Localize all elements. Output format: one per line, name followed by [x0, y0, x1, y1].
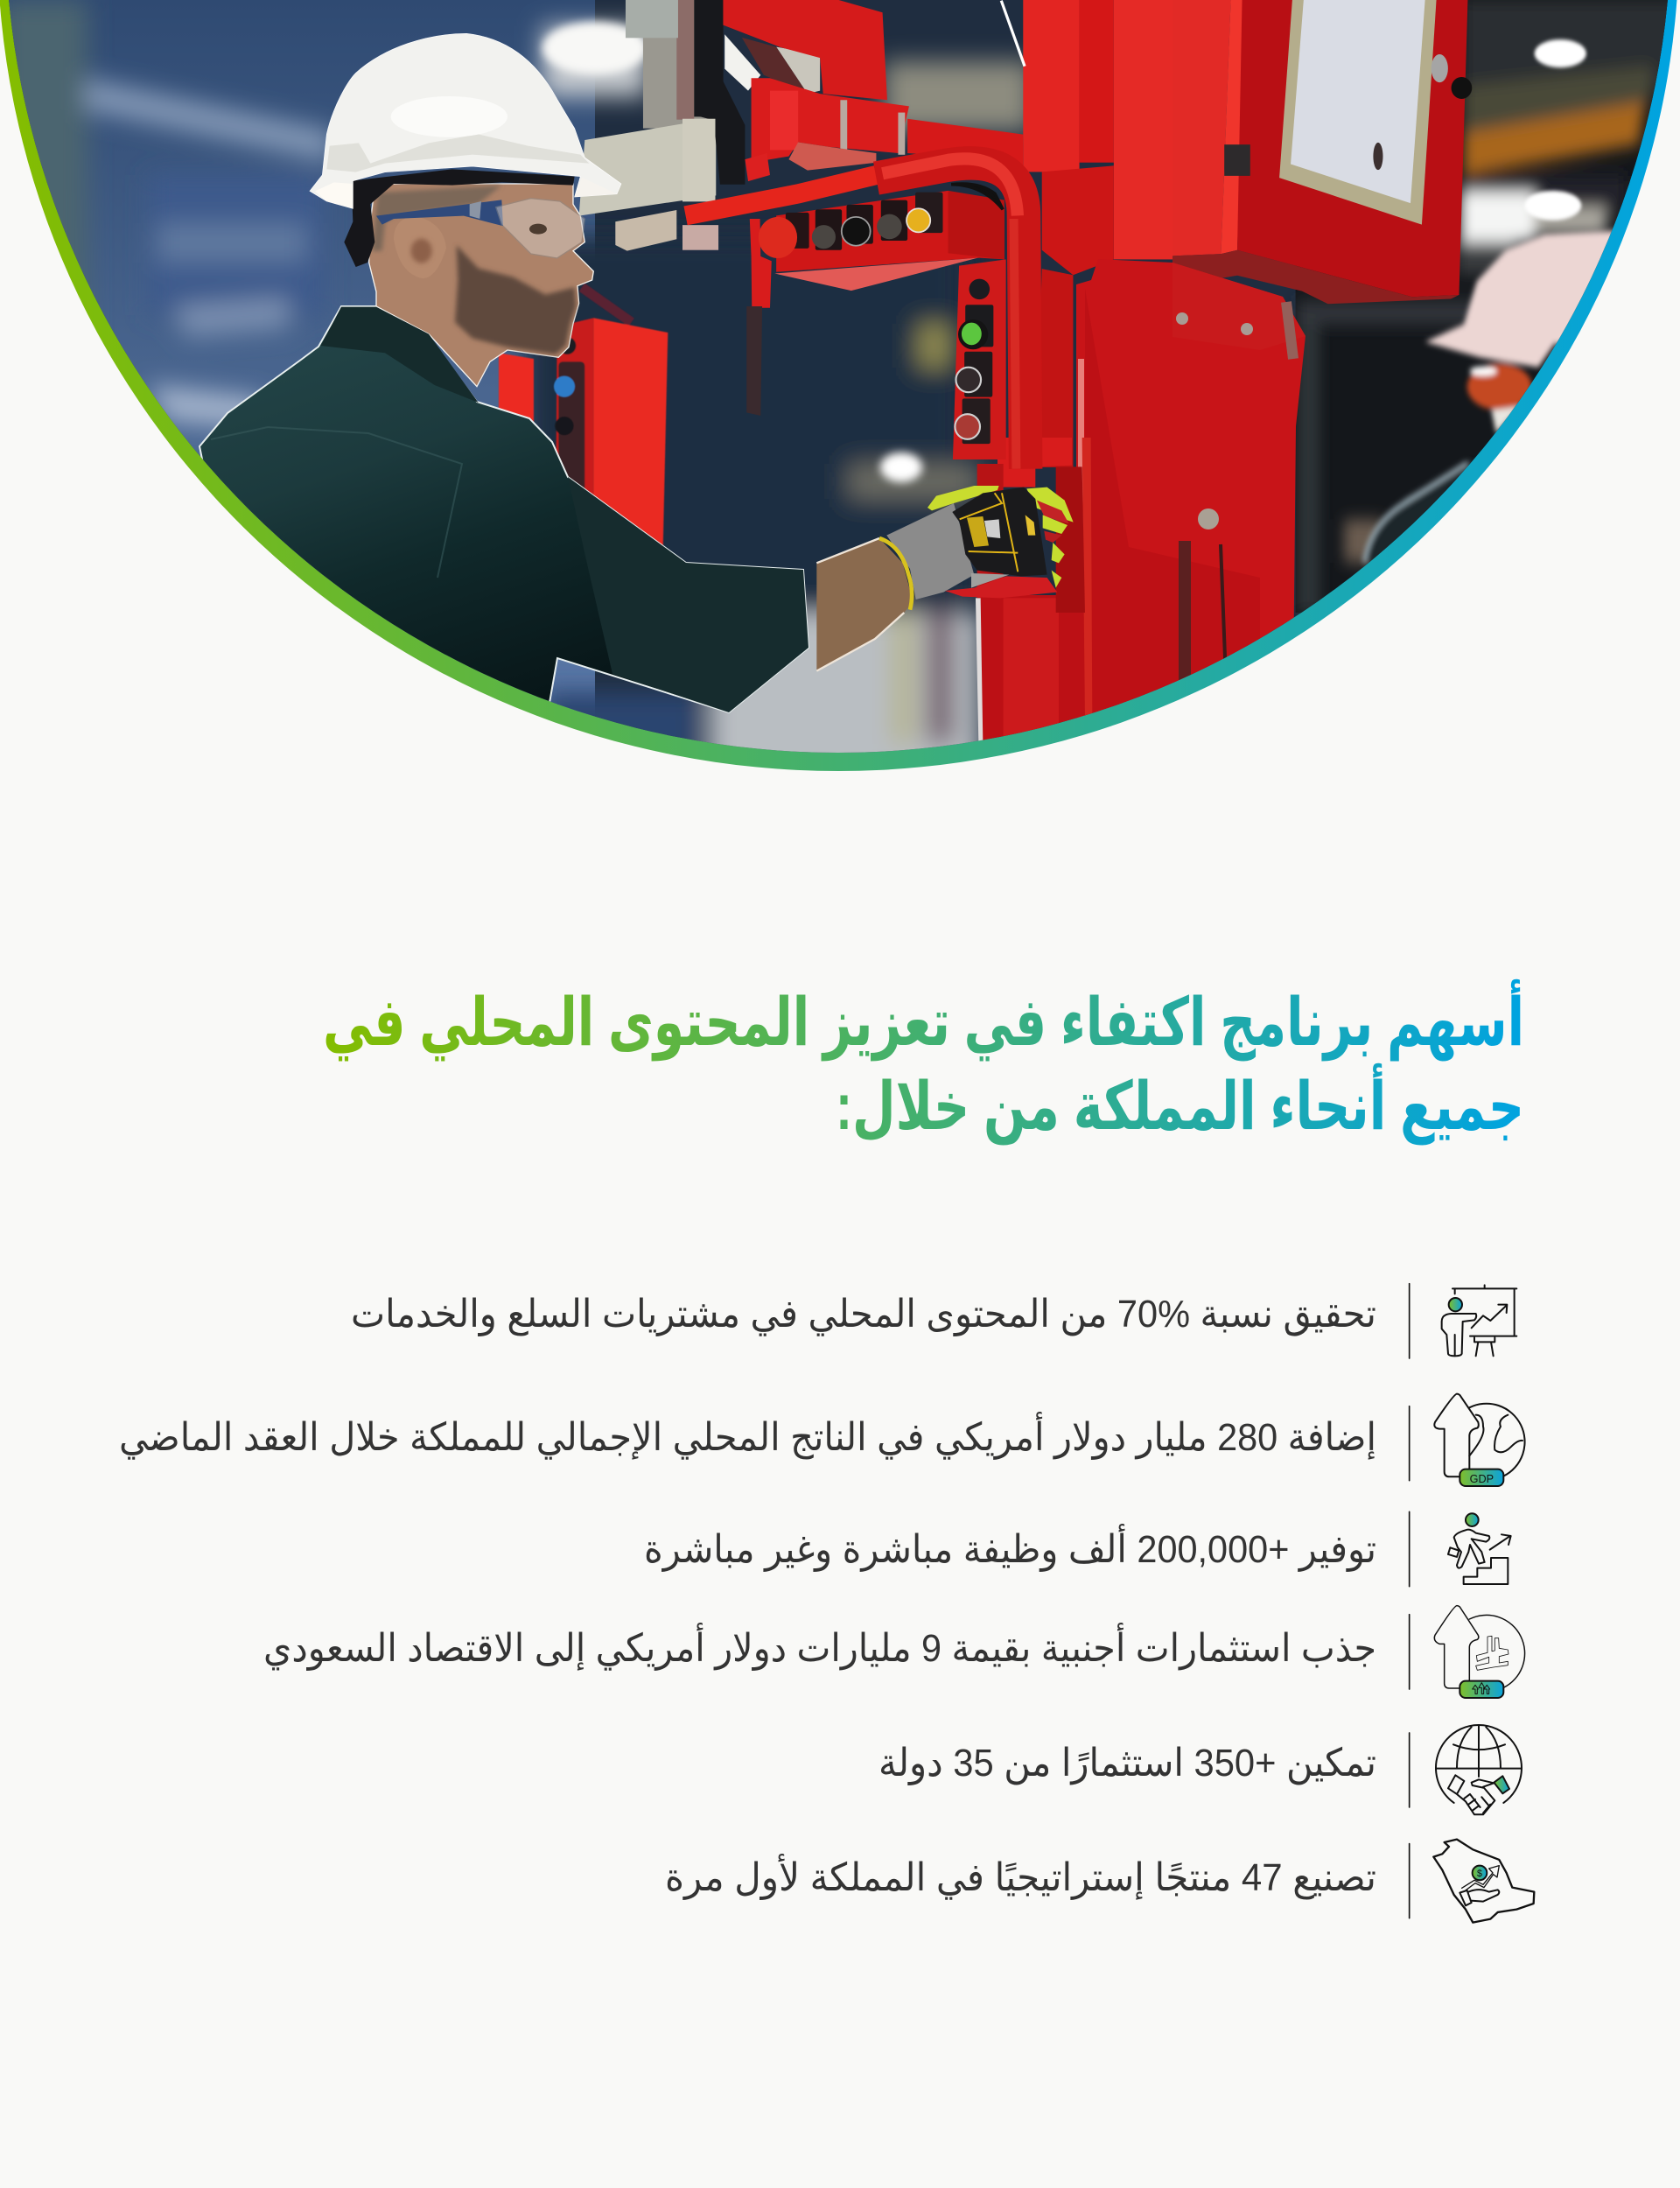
background right side	[1296, 0, 1680, 614]
row 2: GDP	[119, 1394, 1525, 1486]
main column	[1001, 0, 1173, 467]
glasses	[376, 199, 584, 258]
divider and icon: Saudi map	[1410, 1840, 1534, 1923]
divider and icon: climbing stairs	[1410, 1511, 1511, 1587]
worker	[200, 33, 1074, 753]
row 3: jobs	[644, 1511, 1511, 1587]
divider and icon: presenter	[1410, 1284, 1516, 1358]
text: تمكين +350 استثمارًا من 35 دولة	[878, 1742, 1376, 1785]
sleeve light area	[568, 477, 808, 712]
vertical pipe and button panel	[876, 158, 1026, 469]
text: تصنيع 47 منتجًا إستراتيجيًا في المملكة لأول مرة	[665, 1853, 1376, 1900]
row 4: foreign investment	[263, 1606, 1525, 1698]
divider and icon: Saudi map: $	[1477, 1869, 1482, 1879]
heading	[323, 978, 1524, 1146]
text: إضافة 280 مليار دولار أمريكي في الناتج المحلي الإجمالي للمملكة خلال العقد الماضي	[119, 1412, 1376, 1460]
divider and icon: investment arrow	[1410, 1606, 1525, 1698]
red machine: upper arm and control box	[682, 0, 1023, 416]
text: تحقيق نسبة %70 من المحتوى المحلي في مشتريات السلع والخدمات	[351, 1293, 1376, 1336]
row 5: investors	[878, 1725, 1522, 1814]
row 6: manufacturing	[665, 1840, 1534, 1923]
jacket	[200, 306, 808, 753]
photo: worker operating red machine	[0, 0, 1680, 788]
seam	[211, 427, 462, 578]
text: توفير +200,000 ألف وظيفة مباشرة وغير مباشرة	[644, 1524, 1376, 1572]
arm	[816, 486, 1074, 671]
divider and icon: globe handshake	[1410, 1725, 1522, 1814]
photo background: blurred factory	[0, 0, 1680, 788]
white hard hat	[310, 33, 621, 208]
cabinet	[1172, 0, 1472, 304]
head	[344, 169, 593, 387]
divider and icon: GDP: GDP	[1470, 1473, 1494, 1485]
lower column at hand	[976, 438, 1092, 740]
gradient ring around photo	[0, 0, 1679, 771]
collar	[321, 307, 479, 403]
right lower light bits	[542, 22, 922, 482]
divider and icon: GDP	[1410, 1394, 1525, 1486]
pedestal	[1076, 259, 1306, 718]
second worker on the right	[1363, 230, 1626, 563]
row 1: local content	[351, 1284, 1516, 1358]
label bracket and cable	[579, 0, 724, 251]
text: جذب استثمارات أجنبية بقيمة 9 مليارات دولار أمريكي إلى الاقتصاد السعودي	[263, 1623, 1376, 1671]
small hanging red box	[498, 284, 668, 545]
